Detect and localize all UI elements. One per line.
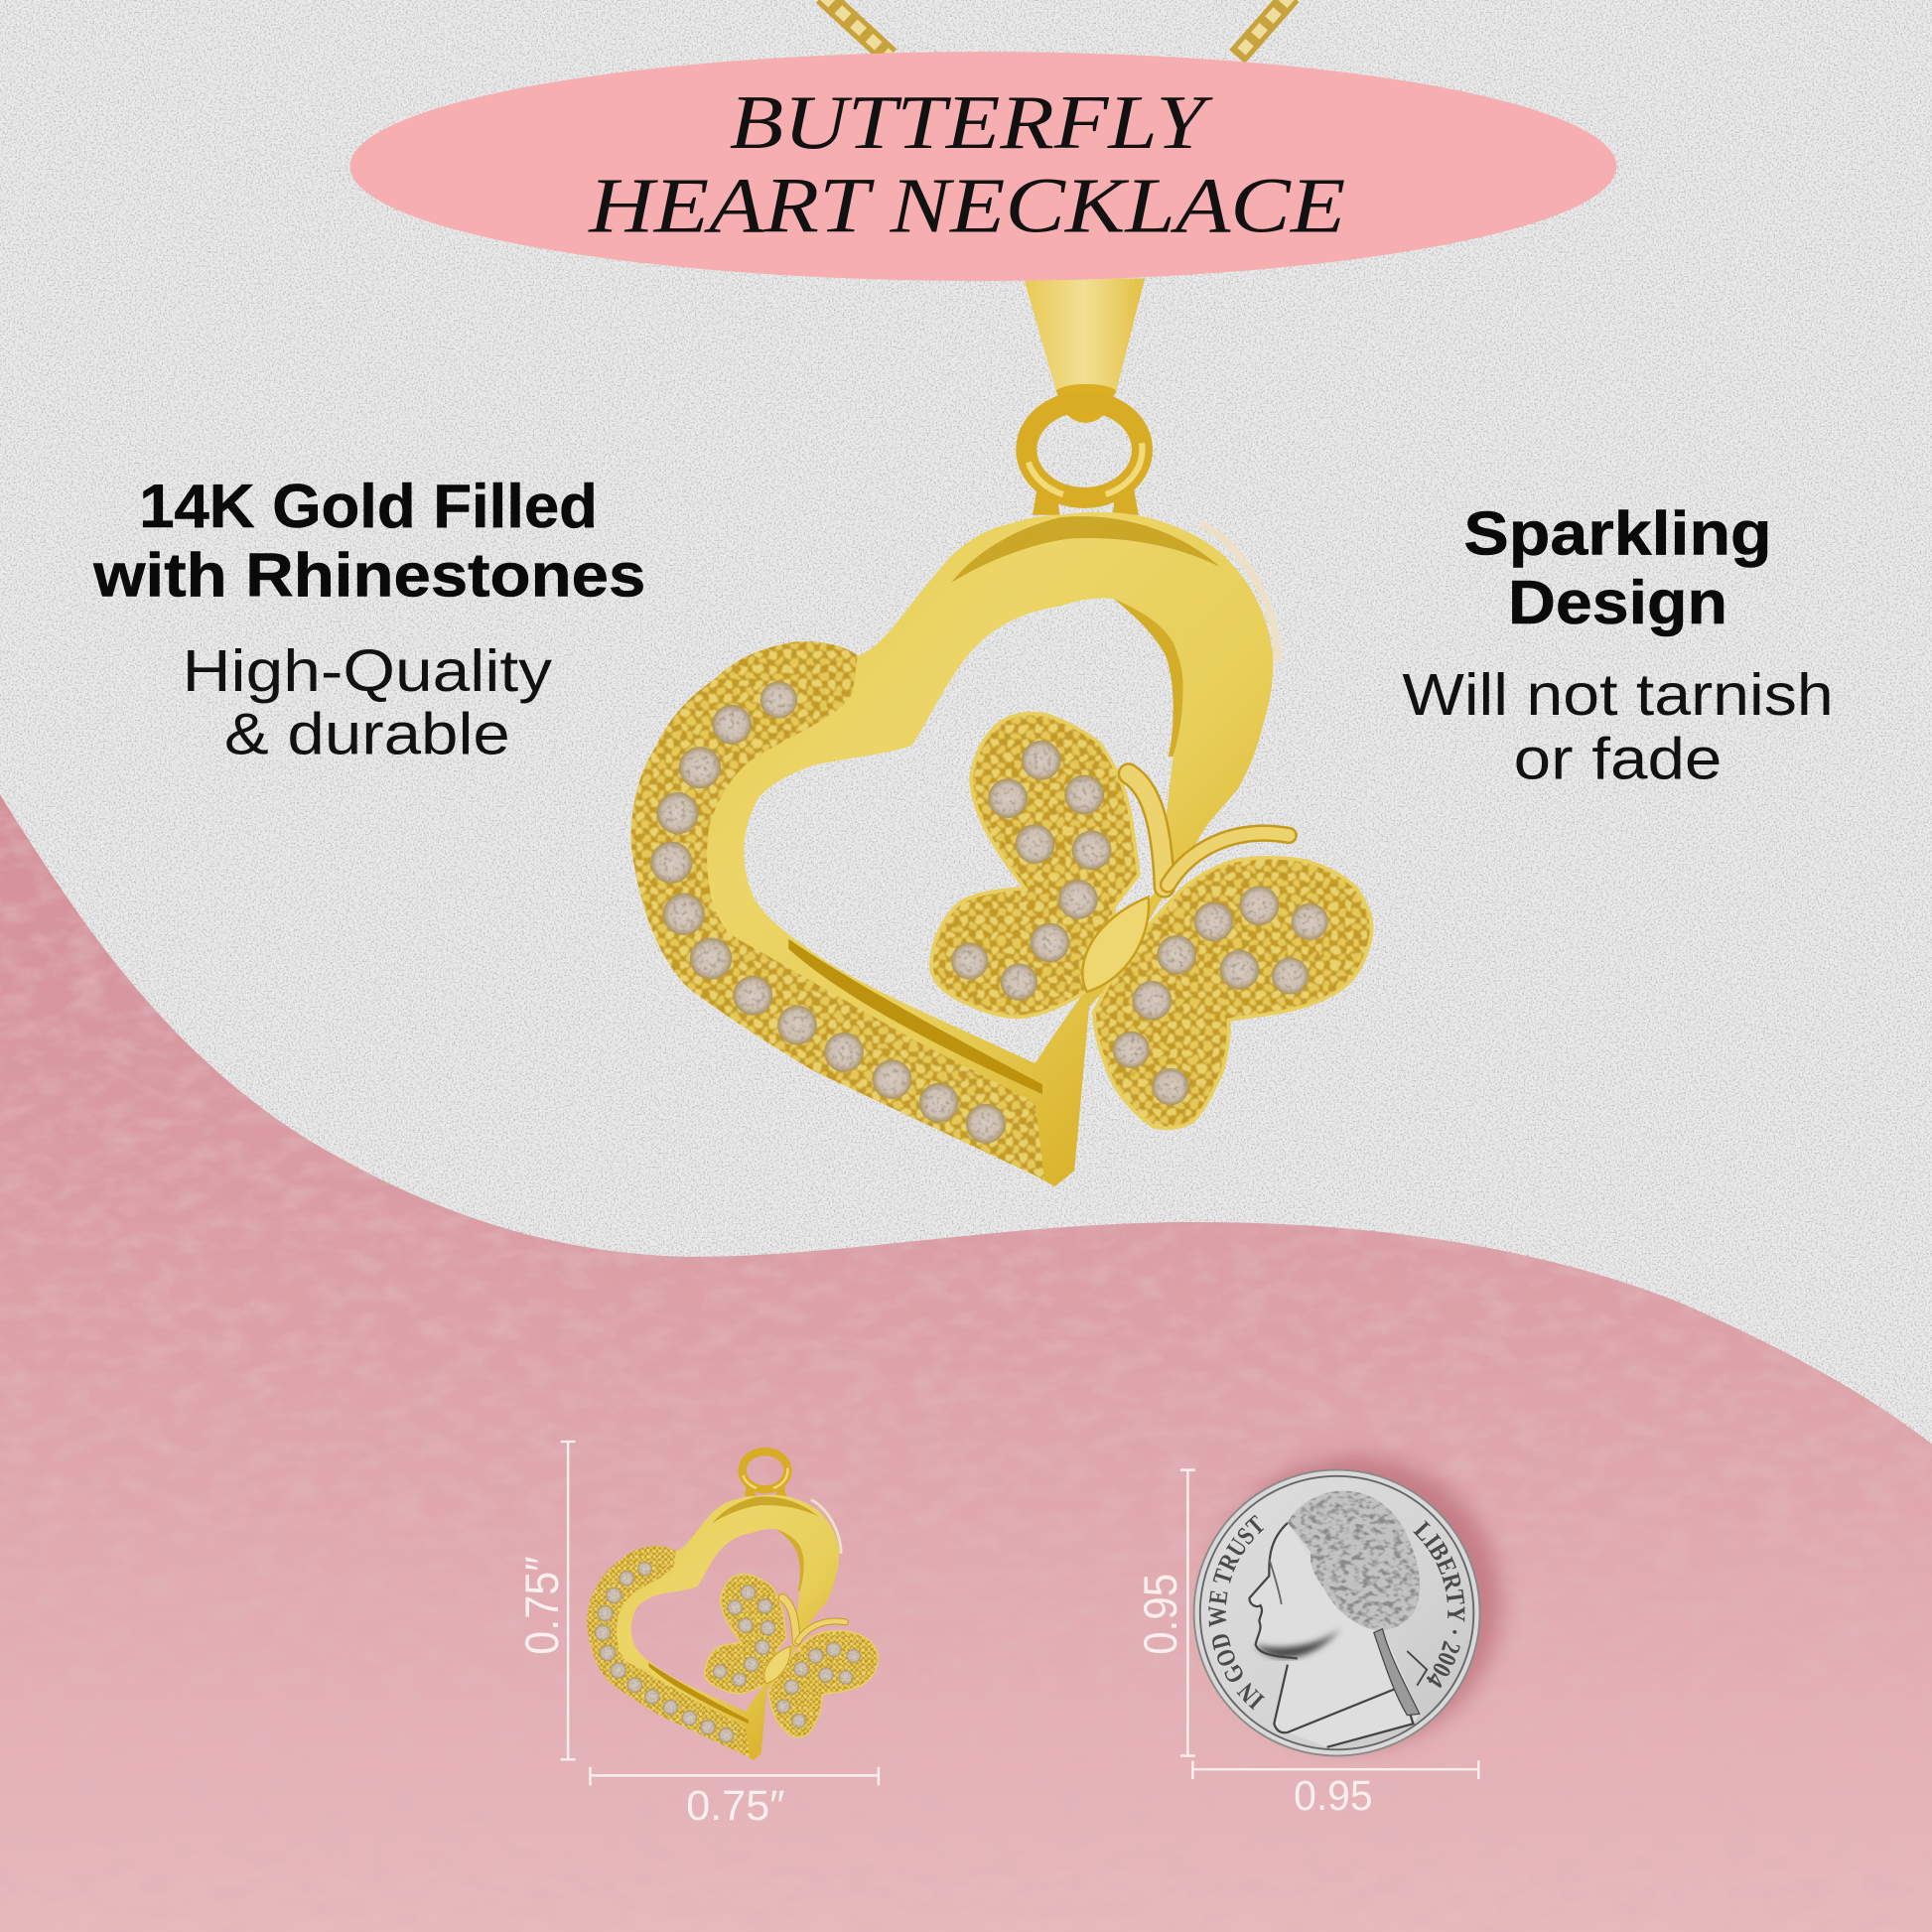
coin height label: 0.95	[1134, 1574, 1186, 1655]
coin inscription: IN GOD WE TRUST	[1208, 1515, 1265, 1710]
pendant dimensions	[515, 1442, 879, 1785]
pendant bail	[1024, 278, 1145, 423]
coin dimensions	[1134, 1470, 1478, 1779]
right feature heading: Sparkling	[1463, 499, 1772, 568]
necklace chain	[823, 0, 1292, 57]
left feature heading: with Rhinestones	[92, 542, 645, 611]
left feature heading: 14K Gold Filled	[139, 473, 598, 541]
title line two: HEART NECKLACE	[588, 162, 1345, 249]
title banner	[349, 52, 1616, 281]
right feature subtext	[1402, 661, 1834, 791]
pink wave background panel	[0, 794, 1932, 1932]
nickel coin size reference	[1193, 1448, 1511, 1757]
small pendant size reference	[581, 1451, 884, 1763]
pendant width label: 0.75″	[686, 1782, 785, 1829]
left feature heading	[92, 473, 645, 611]
coin portrait	[1249, 1484, 1430, 1747]
pendant height label: 0.75″	[515, 1556, 568, 1655]
coin inscription: LIBERTY · 2004	[1413, 1520, 1465, 1688]
coin width label: 0.95	[1294, 1772, 1373, 1819]
main butterfly heart pendant	[617, 402, 1386, 1195]
title line one: BUTTERFLY	[730, 79, 1213, 165]
right feature subtext: Will not tarnish	[1402, 661, 1834, 728]
left feature subtext: High-Quality	[183, 637, 552, 704]
left feature subtext: & durable	[224, 701, 510, 767]
right feature subtext: or fade	[1514, 725, 1722, 791]
right feature heading: Design	[1508, 569, 1727, 637]
coin inscription	[1208, 1515, 1465, 1710]
right feature heading	[1463, 499, 1772, 637]
left feature subtext	[183, 637, 552, 767]
